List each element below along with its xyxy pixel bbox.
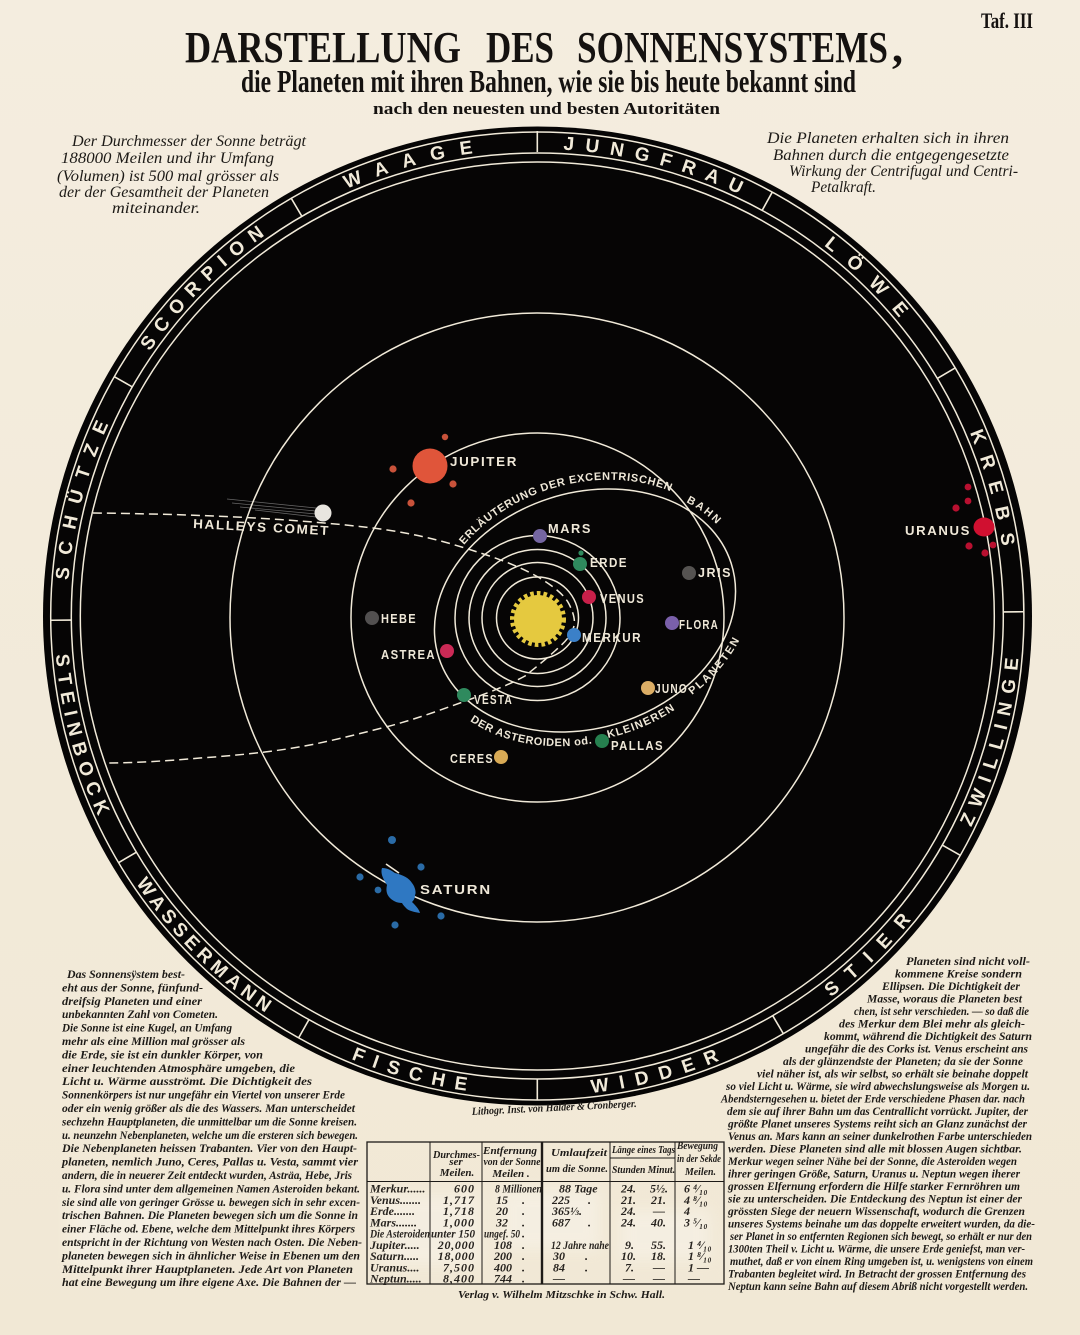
table rows: Venus....... [370, 1193, 421, 1207]
table rows: 7,500 [443, 1261, 475, 1275]
table rows: . [522, 1226, 525, 1240]
Halley's comet: HALLEYS COMET [193, 516, 330, 538]
title: SONNENSYSTEMS [577, 23, 888, 72]
table rows: — [652, 1204, 665, 1218]
zodiac ring: STEINBOCK [56, 654, 110, 816]
table rows: 55. [651, 1238, 666, 1252]
table rows: ungef. 50 [484, 1226, 520, 1240]
table rows: 12 Jahre nahe [551, 1238, 610, 1252]
table rows: 32 [495, 1216, 508, 1230]
note: planetary orbits [766, 130, 1018, 196]
title: DARSTELLUNG [185, 23, 461, 72]
text block: left explanation: mehr als eine Million mal grösser als [62, 1034, 245, 1048]
text block: left explanation: planeten, nemlich Juno, Ceres, Pallas u. Vesta, sammt vier [61, 1155, 358, 1169]
table rows: 3 ⁵⁄₁₀ [683, 1216, 708, 1230]
table rows: . [585, 1261, 588, 1275]
planet: Venus: VENUS [600, 591, 645, 606]
table rows: 30 [552, 1249, 565, 1263]
text block: left explanation [61, 967, 362, 1289]
planet: Jupiter with moons: JUPITER [450, 454, 518, 469]
planet: Mars [533, 521, 592, 543]
table header: ser [448, 1156, 463, 1168]
text block: right explanation: so viel Licht u. Wärme, sie wird abwechslungsweise als Morgen u. [725, 1079, 1030, 1093]
planet: Venus [582, 590, 645, 606]
note: sun diameter: (Volumen) ist 500 mal grösser als [57, 168, 279, 185]
zodiac ring [50, 131, 1025, 1101]
orbits [230, 313, 844, 922]
planet: Flora [665, 616, 719, 632]
planet: Pallas: PALLAS [611, 738, 664, 753]
table header: Bewegung [676, 1140, 718, 1152]
table rows: 8,400 [443, 1272, 475, 1286]
table header: Länge eines Tags [611, 1144, 675, 1156]
zodiac ring: SCORPION [141, 225, 264, 350]
planet: Vesta: VESTA [474, 692, 513, 707]
table rows: . [522, 1193, 525, 1207]
note: sun diameter: 188000 Meilen und ihr Umfang [61, 150, 274, 167]
table rows: Merkur...... [369, 1181, 425, 1195]
planet: Jris: JRIS [698, 565, 732, 580]
table rows: 18. [651, 1249, 666, 1263]
table rows: Mars....... [369, 1216, 417, 1230]
text block: right explanation: Ellipsen. Die Dichtigkeit der [881, 979, 1020, 993]
table rows: 687 [552, 1216, 571, 1230]
zodiac ring: WIDDER [590, 1050, 719, 1093]
table rows: 8 Millionen [495, 1181, 542, 1195]
planet: Saturn with ring and moons [356, 836, 492, 929]
text block: left explanation: hat eine Bewegung um ihre eigene Axe. Die Bahnen der — [62, 1275, 356, 1289]
title: , [892, 23, 903, 72]
text block: right explanation: dem sie auf ihrer Bahn um das Centrallicht vorrückt. Jupiter, der [727, 1104, 1028, 1118]
text block: right explanation: ihrer geringen Größe, Saturn, Uranus u. Neptun wegen iherer [728, 1166, 1020, 1180]
table rows: 20 [495, 1204, 508, 1218]
text block: left explanation: entspricht in der Richtung von Westen nach Osten. Die Neben- [62, 1235, 362, 1249]
table header: Meilen. [684, 1166, 716, 1178]
planet: Saturn with ring and moons: SATURN [420, 882, 492, 897]
Halley's comet [193, 499, 332, 538]
table rows: 108 [494, 1238, 512, 1252]
text block: left explanation: unbekannten Zahl von Cometen. [62, 1007, 218, 1021]
table header: in der Sekde [677, 1153, 721, 1165]
table rows: . [585, 1249, 588, 1263]
table rows: 21. [650, 1193, 666, 1207]
text block: right explanation: Planeten sind nicht voll- [906, 954, 1030, 968]
table rows: . [522, 1238, 525, 1252]
note: sun diameter: miteinander. [112, 200, 200, 217]
table rows: Jupiter..... [369, 1238, 420, 1252]
planet: Merkur [567, 628, 642, 645]
text block: left explanation: Die Nebenplaneten heissen Trabanten. Vier von den Haupt- [61, 1141, 357, 1155]
table rows: 744 [494, 1272, 512, 1286]
table rows: 6 ⁴⁄₁₀ [684, 1181, 708, 1195]
text block: right explanation: Merkur wegen seiner Nähe bei der Sonne, die Asteroiden wegen [727, 1154, 1017, 1168]
table rows: . [588, 1216, 591, 1230]
table rows: 21. [620, 1193, 636, 1207]
text block: right explanation: des Merkur dem Blei mehr als gleich- [839, 1016, 1025, 1030]
text block: right explanation: sie zu unterscheiden. Die Entdeckung des Neptun ist einer der [727, 1192, 1022, 1206]
table rows: 24. [620, 1204, 636, 1218]
table rows: . [522, 1216, 525, 1230]
curved label: excentric orbit explanation: DER ASTEROIDEN od. [470, 715, 592, 746]
table rows: Saturn..... [370, 1249, 419, 1263]
table rows: 1 ⁴⁄₁₀ [688, 1238, 712, 1252]
text block: left explanation: Die Sonne ist eine Kugel, an Umfang [61, 1021, 232, 1035]
curved label: excentric orbit explanation: KLEINEREN [606, 704, 674, 738]
text block: left explanation: oder ein wenig größer als die des Wassers. Man unterscheidet [62, 1101, 356, 1115]
table rows: 225 [551, 1193, 570, 1207]
planet: Jupiter with moons [389, 434, 518, 507]
table rows: 1 ⁸⁄₁₀ [688, 1249, 712, 1263]
text block: right explanation: muthet, daß er von einem Ring umgeben ist, u. wenigstens von einem [730, 1254, 1033, 1268]
text block: right explanation: unseres Systems beinahe um das doppelte erweitert wurden, da die- [728, 1216, 1035, 1230]
text block: left explanation: eht aus der Sonne, fünfund- [62, 980, 203, 994]
curved label: excentric orbit explanation: BAHN [686, 496, 722, 524]
text block: right explanation [720, 954, 1035, 1293]
table header: von der Sonne [484, 1156, 541, 1168]
table rows: — [622, 1272, 635, 1286]
table rows: 365⅓. [551, 1204, 582, 1218]
note: planetary orbits: Petalkraft. [810, 179, 876, 196]
plate number: Taf. III [981, 8, 1033, 33]
table rows: Neptun..... [369, 1272, 422, 1286]
sun [512, 594, 564, 644]
table rows: 9. [625, 1238, 634, 1252]
table rows: 10. [621, 1249, 636, 1263]
planet: Astrea: ASTREA [381, 647, 436, 662]
title: DES [486, 23, 554, 72]
table grid [367, 1142, 724, 1284]
table header: Umlaufzeit [551, 1147, 608, 1159]
table rows: 24. [620, 1216, 636, 1230]
text block: right explanation: kommene Kreise sondern [895, 966, 1022, 980]
curved label: excentric orbit explanation: PLANETEN [688, 637, 740, 694]
table rows [369, 1181, 712, 1286]
table header: Stunden Minut. [612, 1164, 675, 1176]
text block: right explanation: kommt, während die Dichtigkeit des Saturn [824, 1029, 1032, 1043]
planet: Vesta [457, 688, 513, 707]
table header: Durchmes- [432, 1149, 480, 1161]
curved label: excentric orbit explanation: ERLÄUTERUNG DER EXCENTRISCHEN [458, 472, 672, 544]
text block: left explanation: einer Fläche od. Ebene, welche dem Mittelpunkt ihres Körpers [62, 1222, 355, 1236]
table rows: . [522, 1261, 525, 1275]
zodiac ring: JUNGFRAU [564, 136, 744, 192]
table rows: 20,000 [437, 1238, 475, 1252]
zodiac ring: WAAGE [342, 140, 472, 188]
table rows: 5½. [650, 1181, 668, 1195]
table rows: 200 [493, 1249, 512, 1263]
table rows: 1 — [688, 1261, 709, 1275]
text block: left explanation: u. neunzehn Nebenplaneten, welche um die ersteren sich bewegen. [62, 1128, 358, 1142]
table rows: 4 [683, 1204, 690, 1218]
table rows: 18,000 [438, 1249, 475, 1263]
zodiac ring: FISCHE [352, 1047, 468, 1091]
data table [367, 1140, 724, 1286]
text block: left explanation: andern, die in neuerer Zeit entdeckt wurden, Asträa, Hebe, Jris [62, 1168, 352, 1182]
table header: Meilen. [439, 1167, 474, 1179]
solar system disc [43, 126, 1032, 1106]
text block: left explanation: sie sind alle von geringer Grösse u. bewegen sich in sehr excen- [61, 1195, 360, 1209]
table rows: 400 [493, 1261, 512, 1275]
table header: um die Sonne. [546, 1163, 608, 1175]
table header: Meilen . [491, 1168, 530, 1180]
table header: Entfernung [482, 1145, 537, 1157]
table rows: 1,718 [443, 1204, 475, 1218]
table rows: — [652, 1272, 665, 1286]
table rows: . [588, 1193, 591, 1207]
text block: right explanation: grossen Elfernung erfordern die Hilfe starker Fernröhren um [727, 1179, 1020, 1193]
planet: Uranus with moons [905, 484, 996, 557]
text block: right explanation: größte Planet unseres Systems reiht sich an Glanz zunächst der [727, 1116, 1027, 1130]
note: sun diameter: Der Durchmesser der Sonne beträgt [71, 133, 307, 150]
title [185, 23, 903, 72]
table rows: 1,000 [443, 1216, 475, 1230]
planet: Hebe: HEBE [381, 611, 417, 626]
table rows: unter 150 [431, 1226, 475, 1240]
text block: left explanation: einer leuchtenden Atmosphäre umgeben, die [62, 1061, 296, 1075]
note: sun diameter: der der Gesamtheit der Planeten [59, 184, 269, 201]
zodiac ring: SCHÜTZE [56, 420, 108, 580]
zodiac ring: STIER [825, 914, 911, 996]
planet: Mars: MARS [548, 521, 592, 536]
table rows: 4 ⁸⁄₁₀ [683, 1193, 708, 1207]
table rows: 15 [496, 1193, 508, 1207]
planet: Erde: ERDE [590, 555, 628, 570]
subtitle: die Planeten mit ihren Bahnen, wie sie bis heute bekannt sind [241, 63, 856, 99]
curved label: excentric orbit explanation [458, 472, 740, 746]
table rows: 600 [454, 1181, 475, 1195]
text block: left explanation: trischen Bahnen. Die Planeten bewegen sich um die Sonne in [62, 1208, 358, 1222]
text block: right explanation: viel näher ist, als wir selbst, so erhält sie beinahe doppelt [757, 1066, 1029, 1080]
zodiac ring: LÖWE [824, 236, 909, 318]
table rows: — [687, 1272, 700, 1286]
text block: left explanation: u. Flora sind unter dem allgemeinen Namen Asteroiden bekant. [62, 1181, 360, 1195]
text block: right explanation: Venus an. Mars kann an seiner dunkelrothen Farbe unterschieden [728, 1129, 1032, 1143]
sub-subtitle: nach den neuesten und besten Autoritäten [373, 99, 721, 118]
text block: right explanation: als der glänzendste der Planeten; da sie der Sonne [783, 1054, 1024, 1068]
text block: left explanation: planeten bewegen sich in ähnlicher Weise in Ebenen um den [61, 1248, 360, 1262]
table rows: Erde....... [369, 1204, 415, 1218]
text block: left explanation: dreifsig Planeten und einer [62, 994, 202, 1008]
table rows: 1,717 [443, 1193, 475, 1207]
zodiac ring: KREBS [970, 428, 1014, 545]
text block: left explanation: sechzehn Hauptplaneten, die unmittelbar um die Sonne kreisen. [61, 1114, 357, 1128]
planet: Ceres: CERES [450, 751, 494, 766]
table rows: 88 Tage [559, 1181, 598, 1195]
table rows: Uranus.... [370, 1261, 419, 1275]
planet: Flora: FLORA [679, 617, 719, 632]
planet: Merkur: MERKUR [582, 630, 642, 645]
text block: left explanation: die Erde, sie ist ein dunkler Körper, von [62, 1047, 263, 1061]
planet: Hebe [365, 611, 417, 626]
text block: left explanation: Sonnenkörpers ist nur ungefähr ein Viertel von unserer Erde [62, 1088, 346, 1102]
text block: left explanation: Das Sonnensÿstem best- [66, 967, 185, 981]
text block: right explanation: grössten Siege der neuern Wissenschaft, wodurch die Grenzen [727, 1204, 1025, 1218]
text block: right explanation: Masse, woraus die Planeten best [866, 992, 1023, 1006]
text block: right explanation: Neptun kann seine Bahn auf diesem Abriß nicht vorgestellt werden. [727, 1279, 1028, 1293]
text block: right explanation: Abendsterngesehen u. bietet der Erde verschiedene Phasen dar. nach [720, 1092, 1025, 1106]
publisher credit: Verlag v. Wilhelm Mitzschke in Schw. Hall. [458, 1289, 665, 1301]
note: planetary orbits: Die Planeten erhalten sich in ihren [766, 130, 1009, 147]
table rows: — [552, 1272, 565, 1286]
planet: Juno [641, 681, 688, 696]
text block: left explanation: Licht u. Wärme ausströmt. Die Dichtigkeit des [61, 1074, 312, 1088]
table rows: — [652, 1261, 665, 1275]
table header [432, 1140, 721, 1180]
table rows: 24. [620, 1181, 636, 1195]
note: planetary orbits: Bahnen durch die entgegengesetzte [773, 147, 1009, 164]
text block: right explanation: 1300ten Theil v. Licht u. Wärme, die unsere Erde geniefst, man ver- [728, 1242, 1025, 1256]
text block: left explanation: Mittelpunkt ihrer Hauptplaneten. Jede Art von Planeten [61, 1262, 353, 1276]
zodiac ring: ZWILLINGE [960, 658, 1018, 827]
planet: Pallas [595, 734, 664, 753]
text block: right explanation: ungefähr die des Corks ist. Venus erscheint ans [805, 1042, 1028, 1056]
lithographer credit: Lithogr. Inst. von Halder & Cronberger. [471, 1098, 637, 1118]
note: sun diameter [57, 133, 307, 217]
table rows: . [522, 1272, 525, 1286]
planet: Jris [682, 565, 732, 580]
table rows: Die Asteroiden [369, 1226, 430, 1240]
table rows: 40. [650, 1216, 666, 1230]
text block: right explanation: Trabanten begleitet wird. In Betracht der grossen Entfernung des [728, 1266, 1026, 1280]
planet: Uranus with moons: URANUS [905, 523, 971, 538]
text block: right explanation: chen, ist sehr verschieden. — so daß die [854, 1004, 1030, 1018]
zodiac ring: WASSERMANN [138, 876, 272, 1012]
table rows: 7. [625, 1261, 634, 1275]
table rows: . [522, 1204, 525, 1218]
note: planetary orbits: Wirkung der Centrifugal und Centri- [789, 163, 1018, 180]
table rows: . [522, 1249, 525, 1263]
Halley's comet path [93, 513, 574, 763]
text block: right explanation: ser Planet in so entfernten Regionen sich bewegt, so erhält er nur den [729, 1229, 1032, 1243]
planet: Erde [573, 550, 628, 571]
planet: Juno: JUNO [655, 681, 688, 696]
black disc [43, 126, 1032, 1106]
text block: right explanation: werden. Diese Planeten sind alle mit blossen Augen sichtbar. [728, 1142, 1022, 1156]
table rows: 84 [553, 1261, 565, 1275]
